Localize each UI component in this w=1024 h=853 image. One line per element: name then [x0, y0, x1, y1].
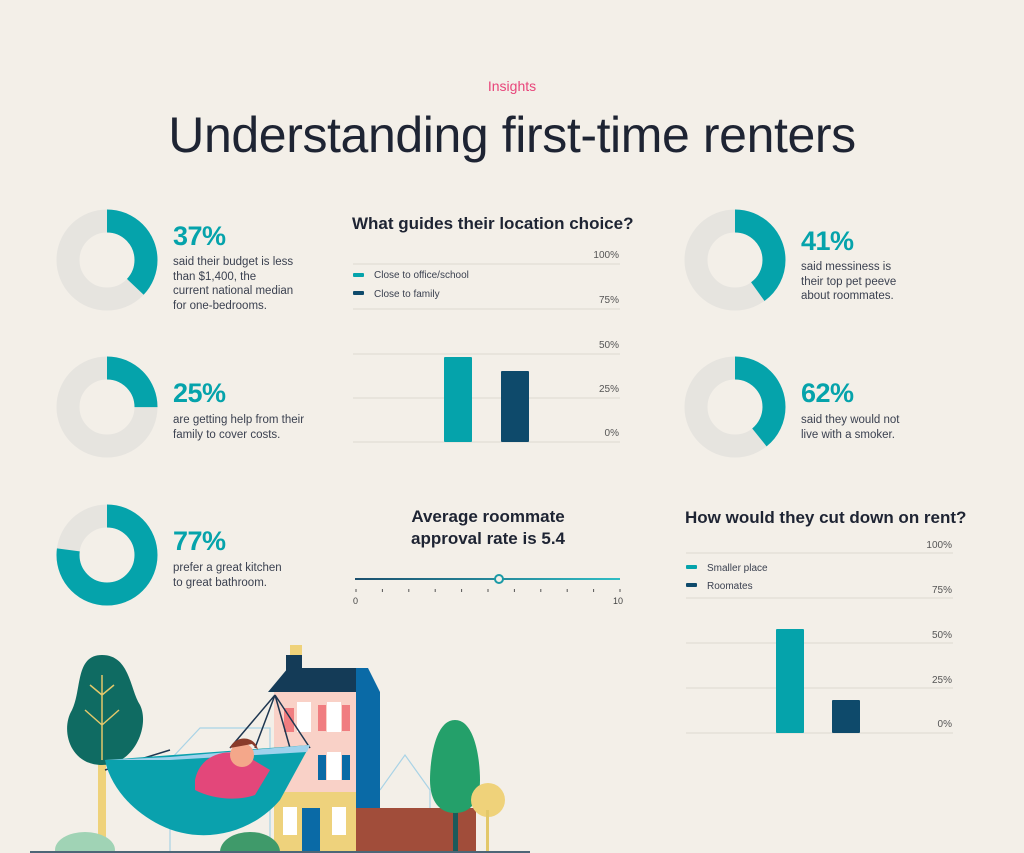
house: [268, 645, 380, 853]
slider: roommate approval: Average roommate: [411, 507, 565, 526]
stat: 41%: their top pet peeve: [801, 276, 896, 288]
stat: 41%: 41%: [801, 226, 854, 256]
stat: 37%: for one-bedrooms.: [173, 300, 267, 312]
stat: 37%: [56, 210, 293, 312]
chart: cut down on rent: Roomates: [707, 581, 753, 592]
stat: 62%: 62%: [801, 378, 854, 408]
stat: 77%: [56, 504, 282, 606]
stat: 62%: said they would not: [801, 414, 899, 426]
chart: location choice: 75%: [599, 295, 619, 306]
chart: location choice: 25%: [599, 384, 619, 395]
fence: [356, 808, 476, 853]
stat: 37%: current national median: [173, 285, 293, 297]
hammock with person: [105, 695, 310, 835]
chart: location choice: Close to office/school: [374, 270, 469, 281]
stat: 25%: family to cover costs.: [173, 428, 280, 440]
eyebrow: Insights: Insights: [488, 78, 536, 94]
stat: 37%: 37%: [173, 221, 226, 251]
stat: 25%: are getting help from their: [173, 414, 304, 426]
chart heading: How would they cut down on rent?: [685, 508, 966, 527]
bushes: [55, 832, 280, 853]
slider: roommate approval: approval rate is 5.4: [411, 529, 565, 548]
chart: cut down on rent: 25%: [932, 675, 952, 686]
tree right: [430, 720, 505, 853]
chart: location choice: [352, 214, 633, 442]
stat: 41%: said messiness is: [801, 261, 891, 273]
stat: 25%: 25%: [173, 378, 226, 408]
illustration: hammock and house: [30, 645, 530, 853]
stat: 77%: to great bathroom.: [173, 576, 267, 588]
slider: roommate approval: [353, 507, 623, 606]
background outline houses: [170, 728, 430, 853]
slider: roommate approval: 10: [613, 596, 623, 606]
stat: 77%: prefer a great kitchen: [173, 562, 282, 574]
chart: cut down on rent: 50%: [932, 630, 952, 641]
stat: 62%: [684, 356, 900, 458]
chart: location choice: 0%: [605, 428, 619, 439]
stat: 41%: about roommates.: [801, 290, 894, 302]
chart heading: What guides their location choice?: [352, 214, 633, 233]
chart: location choice: 100%: [593, 250, 619, 261]
chart: cut down on rent: [685, 508, 966, 734]
chart: cut down on rent: Smaller place: [707, 563, 768, 574]
slider: roommate approval: 0: [353, 596, 358, 606]
stat: 77%: 77%: [173, 526, 226, 556]
stat: 25%: [56, 356, 304, 458]
chart: cut down on rent: 100%: [926, 540, 952, 551]
title: Understanding first-time renters: [168, 107, 856, 163]
chart: cut down on rent: 0%: [938, 719, 952, 730]
stat: 37%: said their budget is less: [173, 256, 293, 268]
stat: 37%: than $1,400, the: [173, 270, 256, 282]
stat: 62%: live with a smoker.: [801, 428, 895, 440]
chart: cut down on rent: 75%: [932, 585, 952, 596]
stat: 41%: [684, 210, 896, 310]
chart: location choice: 50%: [599, 340, 619, 351]
tree left: [67, 655, 143, 853]
chart: location choice: Close to family: [374, 289, 440, 300]
